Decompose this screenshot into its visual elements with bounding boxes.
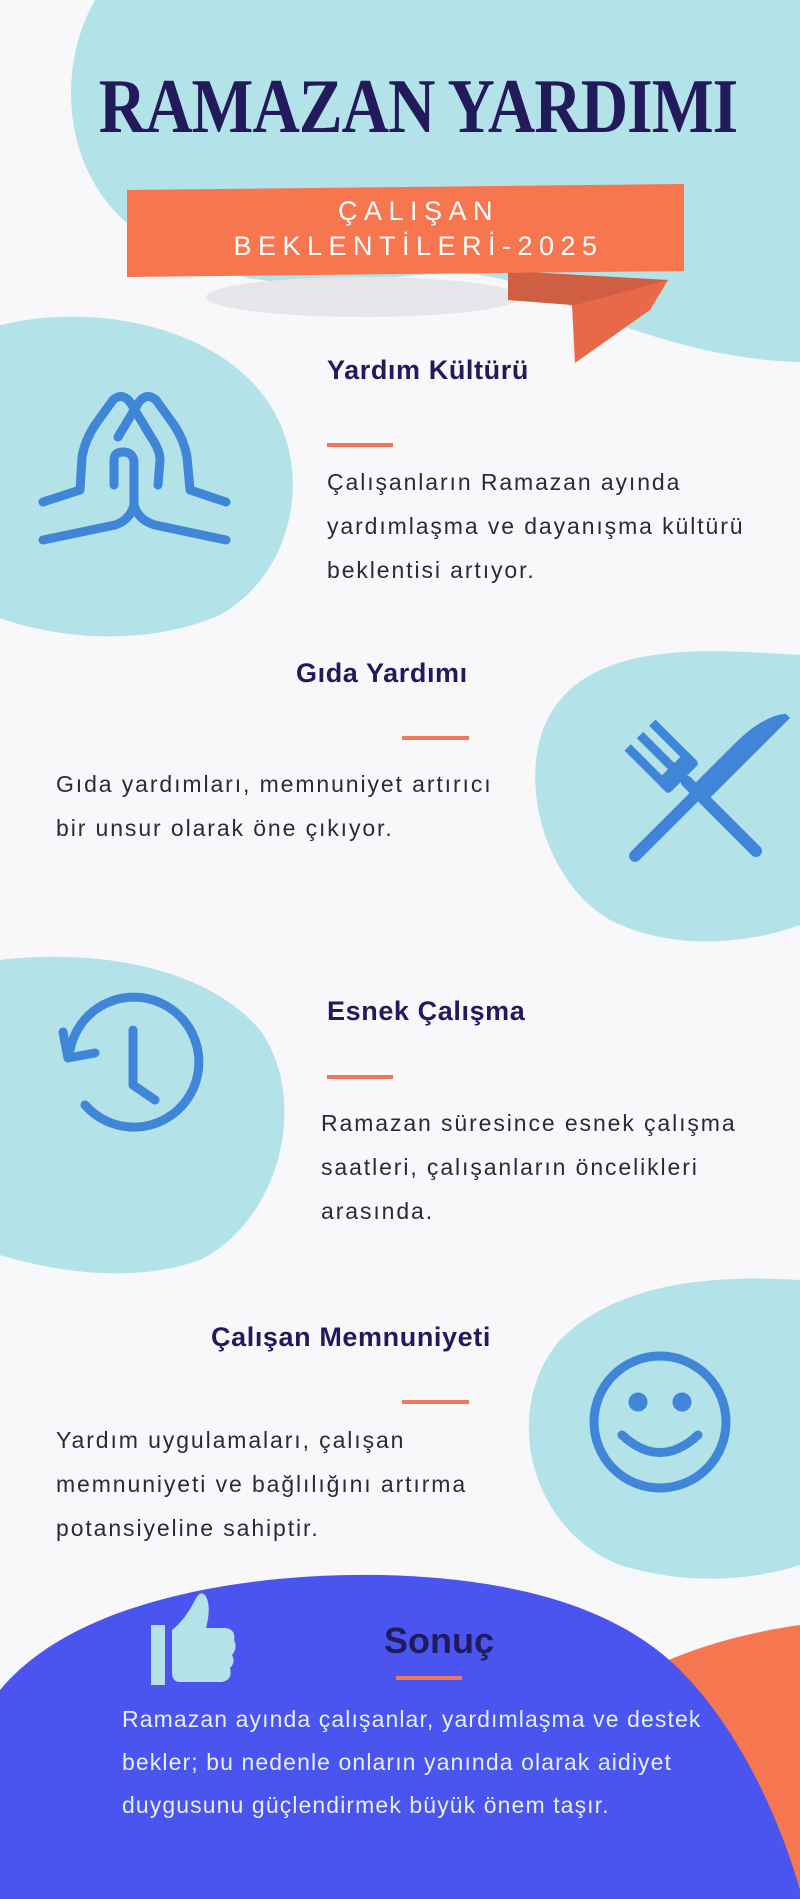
icon: praying hands xyxy=(43,396,226,540)
text: section 2: Gıda yardımları, memnuniyet artırıcı xyxy=(56,771,493,797)
text: section 1: Çalışanların Ramazan ayında xyxy=(327,469,681,495)
subtitle banner text: BEKLENTİLERİ-2025 xyxy=(233,231,604,261)
top blob xyxy=(71,0,800,362)
bottom orange blob xyxy=(650,1625,800,1899)
text: section 3: Ramazan süresince esnek çalışma xyxy=(321,1110,737,1136)
subtitle banner text: ÇALIŞAN xyxy=(338,196,499,226)
text: conclusion xyxy=(122,1706,702,1818)
blob: section 2 xyxy=(535,651,800,941)
orange banner xyxy=(127,184,684,277)
shadow ellipse xyxy=(206,277,520,317)
heading: Yardım Kültürü: Yardım Kültürü xyxy=(327,355,529,385)
icon: smiley xyxy=(594,1356,726,1488)
text: section 4 xyxy=(56,1427,467,1541)
heading: Çalışan Memnuniyeti: Çalışan Memnuniyeti xyxy=(211,1322,491,1352)
title: RAMAZAN YARDIMI xyxy=(99,63,737,149)
text: section 3 xyxy=(321,1110,737,1224)
text: section 1: beklentisi artıyor. xyxy=(327,557,536,583)
text: section 2: bir unsur olarak öne çıkıyor. xyxy=(56,815,394,841)
icon: fork and knife xyxy=(624,703,790,871)
text: conclusion: bekler; bu nedenle onların yanında olarak aidiyet xyxy=(122,1749,672,1775)
text: conclusion: duygusunu güçlendirmek büyük önem taşır. xyxy=(122,1792,610,1818)
text: section 2 xyxy=(56,771,493,841)
text: section 1 xyxy=(327,469,744,583)
icon: thumbs up xyxy=(151,1593,236,1685)
icon: clock history xyxy=(63,997,199,1127)
ribbon tail xyxy=(508,271,668,363)
text: section 4: potansiyeline sahiptir. xyxy=(56,1515,320,1541)
blob: section 1 xyxy=(0,317,293,636)
blob: section 3 xyxy=(0,957,284,1273)
heading: Sonuç: Sonuç xyxy=(384,1620,494,1661)
text: section 4: Yardım uygulamaları, çalışan xyxy=(56,1427,405,1453)
heading: Esnek Çalışma: Esnek Çalışma xyxy=(327,996,525,1026)
text: section 3: saatleri, çalışanların öncelikleri xyxy=(321,1154,699,1180)
bottom blue blob xyxy=(0,1575,800,1899)
text: conclusion: Ramazan ayında çalışanlar, yardımlaşma ve destek xyxy=(122,1706,702,1732)
text: section 1: yardımlaşma ve dayanışma kültürü xyxy=(327,513,744,539)
text: section 4: memnuniyeti ve bağlılığını artırma xyxy=(56,1471,467,1497)
blob: section 4 xyxy=(529,1279,800,1579)
heading: Gıda Yardımı: Gıda Yardımı xyxy=(296,658,468,688)
text: section 3: arasında. xyxy=(321,1198,434,1224)
subtitle banner text xyxy=(233,196,604,261)
